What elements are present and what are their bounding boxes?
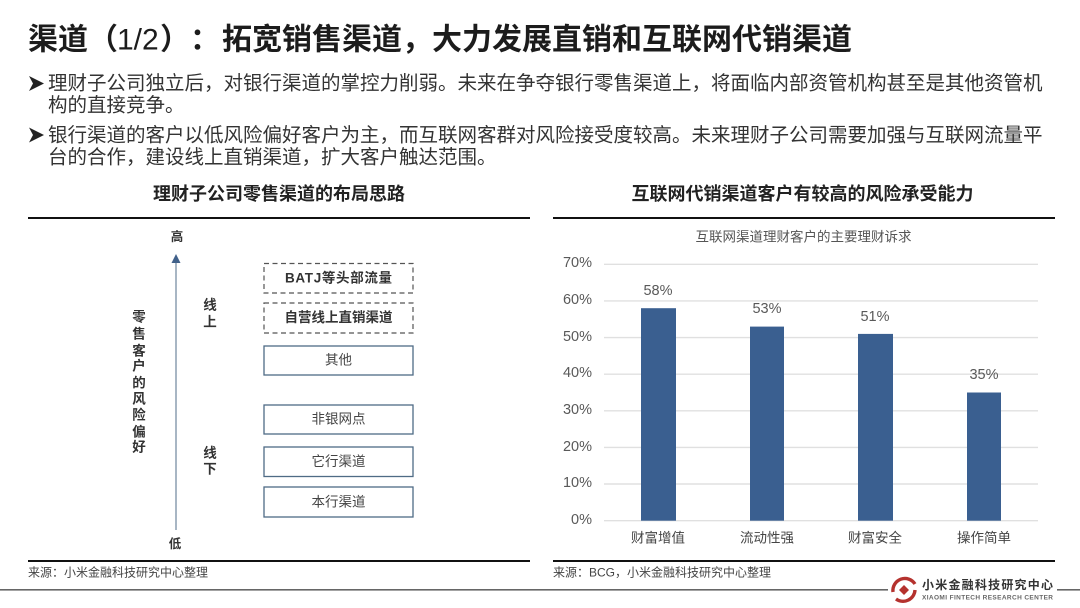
logo text: 小米金融科技研究中心	[922, 577, 1053, 592]
axis title: retail client risk appetite: 客	[132, 342, 146, 358]
bullet 1: 理财子公司独立后，对银行渠道的掌控力削弱。未来在争夺银行零售渠道上，将面临内部资管机构甚至是其他资管机	[48, 72, 1043, 94]
axis title: retail client risk appetite: 好	[132, 440, 146, 454]
axis title: retail client risk appetite: 户	[132, 358, 146, 374]
box: other banks: 它行渠道	[312, 453, 366, 469]
text block: key points	[29, 72, 1043, 168]
x axis labels: 财富增值	[631, 530, 685, 546]
bars	[641, 308, 1001, 521]
box: own bank	[264, 487, 413, 517]
title: ：	[190, 24, 220, 56]
y axis labels	[563, 255, 592, 528]
box: own bank: 本行渠道	[312, 494, 366, 510]
group label: online: 上	[203, 314, 217, 330]
x axis labels	[631, 530, 1011, 546]
axis title: retail client risk appetite: 险	[132, 406, 146, 422]
box: BATJ traffic	[264, 264, 413, 293]
heading: right panel: 互联网代销渠道客户有较高的风险承受能力	[632, 183, 974, 204]
x axis labels: 操作简单	[957, 530, 1011, 546]
bullet 1: 构的直接竞争。	[48, 94, 185, 116]
title: （	[88, 24, 118, 56]
panel: retail channel layout	[28, 183, 530, 580]
group label: online	[203, 296, 217, 330]
icon: logo mark	[893, 578, 915, 601]
logo: Xiaomi Fintech Research Center	[893, 577, 1053, 602]
axis title: retail client risk appetite: 售	[132, 326, 146, 342]
footer rule right	[1057, 589, 1080, 591]
heading: left panel: 理财子公司零售渠道的布局思路	[153, 183, 405, 204]
logo english text: XIAOMI FINTECH RESEARCH CENTER	[922, 594, 1053, 602]
box: own online direct sales	[264, 303, 413, 333]
group label: offline	[203, 444, 217, 476]
y axis labels: 10%	[563, 475, 592, 491]
axis arrow: risk appetite	[172, 254, 180, 530]
box: other	[264, 346, 413, 375]
y axis labels: 30%	[563, 402, 592, 418]
bullet 2	[29, 124, 1043, 168]
bullet 2: 银行渠道的客户以低风险偏好客户为主，而互联网客群对风险接受度较高。未来理财子公司需要加强与互联网流量平	[48, 124, 1043, 146]
source: left: 来源：小米金融科技研究中心整理	[28, 564, 208, 580]
data labels	[643, 283, 999, 383]
bullet 1	[29, 72, 1043, 116]
axis label: high: 高	[171, 229, 183, 244]
box: other banks	[264, 447, 413, 476]
axis title: retail client risk appetite: 偏	[132, 424, 146, 440]
panel: internet channel risk tolerance	[553, 183, 1055, 580]
axis title: retail client risk appetite: 风	[132, 392, 146, 406]
box: non-bank outlets: 非银网点	[312, 412, 366, 426]
title: 1/2	[117, 24, 159, 56]
y axis labels: 20%	[563, 439, 592, 455]
group label: offline: 线	[203, 444, 217, 460]
box: non-bank outlets	[264, 405, 413, 434]
y axis labels: 50%	[563, 329, 592, 345]
data labels: 53%	[752, 301, 782, 317]
box: own online direct sales: 自营线上直销渠道	[284, 309, 393, 325]
y axis labels: 70%	[563, 255, 592, 271]
group label: offline: 下	[203, 462, 217, 476]
y axis labels: 60%	[563, 292, 592, 308]
source: right: 来源：BCG，小米金融科技研究中心整理	[553, 564, 771, 580]
box: BATJ traffic: BATJ等头部流量	[285, 270, 392, 286]
axis title: retail client risk appetite: 零	[132, 310, 146, 324]
axis title: retail client risk appetite	[132, 310, 146, 454]
data labels: 35%	[969, 367, 999, 383]
x axis labels: 财富安全	[848, 530, 902, 546]
chart title: 互联网渠道理财客户的主要理财诉求	[696, 228, 912, 244]
axis title: retail client risk appetite: 的	[132, 374, 146, 390]
y axis labels: 0%	[571, 512, 592, 528]
title: 拓宽销售渠道，大力发展直销和互联网代销渠道	[222, 24, 852, 56]
data labels: 51%	[860, 309, 890, 325]
data labels: 58%	[643, 283, 673, 299]
x axis labels: 流动性强	[740, 530, 794, 546]
y axis labels: 40%	[563, 365, 592, 381]
axis label: low: 低	[169, 536, 182, 551]
title: 渠道	[28, 24, 88, 56]
bullet 2: 台的合作，建设线上直销渠道，扩大客户触达范围。	[48, 146, 497, 168]
bar chart	[563, 255, 1038, 546]
footer rule left	[0, 589, 888, 591]
box: other: 其他	[325, 352, 352, 368]
group label: online: 线	[203, 296, 217, 312]
title: ）	[160, 24, 190, 56]
